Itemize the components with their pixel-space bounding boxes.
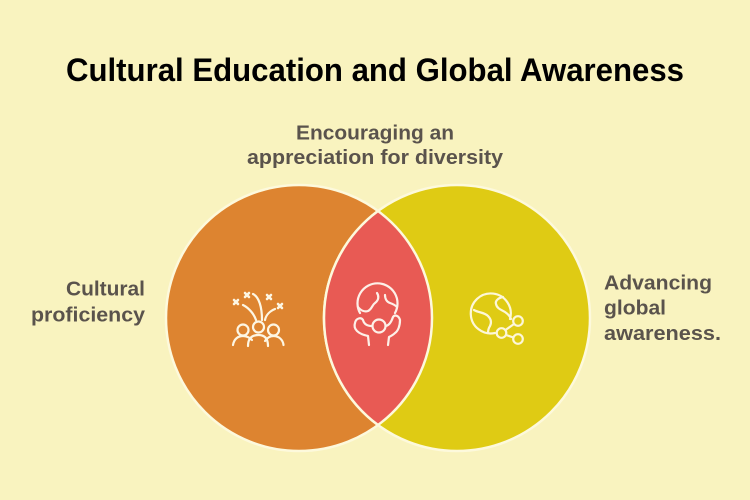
icon: person holding globe — [355, 283, 400, 345]
overlap — [324, 211, 432, 425]
right label: global awareness — [604, 272, 721, 345]
top label: diversity — [247, 122, 504, 169]
right label: global awareness: awareness. — [604, 322, 721, 345]
venn diagram — [166, 185, 590, 451]
left label: cultural proficiency: proficiency — [31, 304, 146, 326]
right circle — [324, 185, 590, 451]
title: Cultural Education and Global Awareness — [66, 52, 684, 88]
left label: cultural proficiency: Cultural — [66, 278, 145, 300]
icon: globe with share network — [471, 293, 523, 344]
left label: cultural proficiency — [31, 278, 146, 326]
left circle — [166, 185, 432, 451]
right label: global awareness: Advancing — [604, 272, 712, 294]
top label: diversity: Encouraging an — [296, 122, 454, 144]
right label: global awareness: global — [604, 296, 666, 320]
top label: diversity: appreciation for diversity — [247, 146, 504, 169]
icon: crowd with fireworks — [233, 293, 284, 346]
